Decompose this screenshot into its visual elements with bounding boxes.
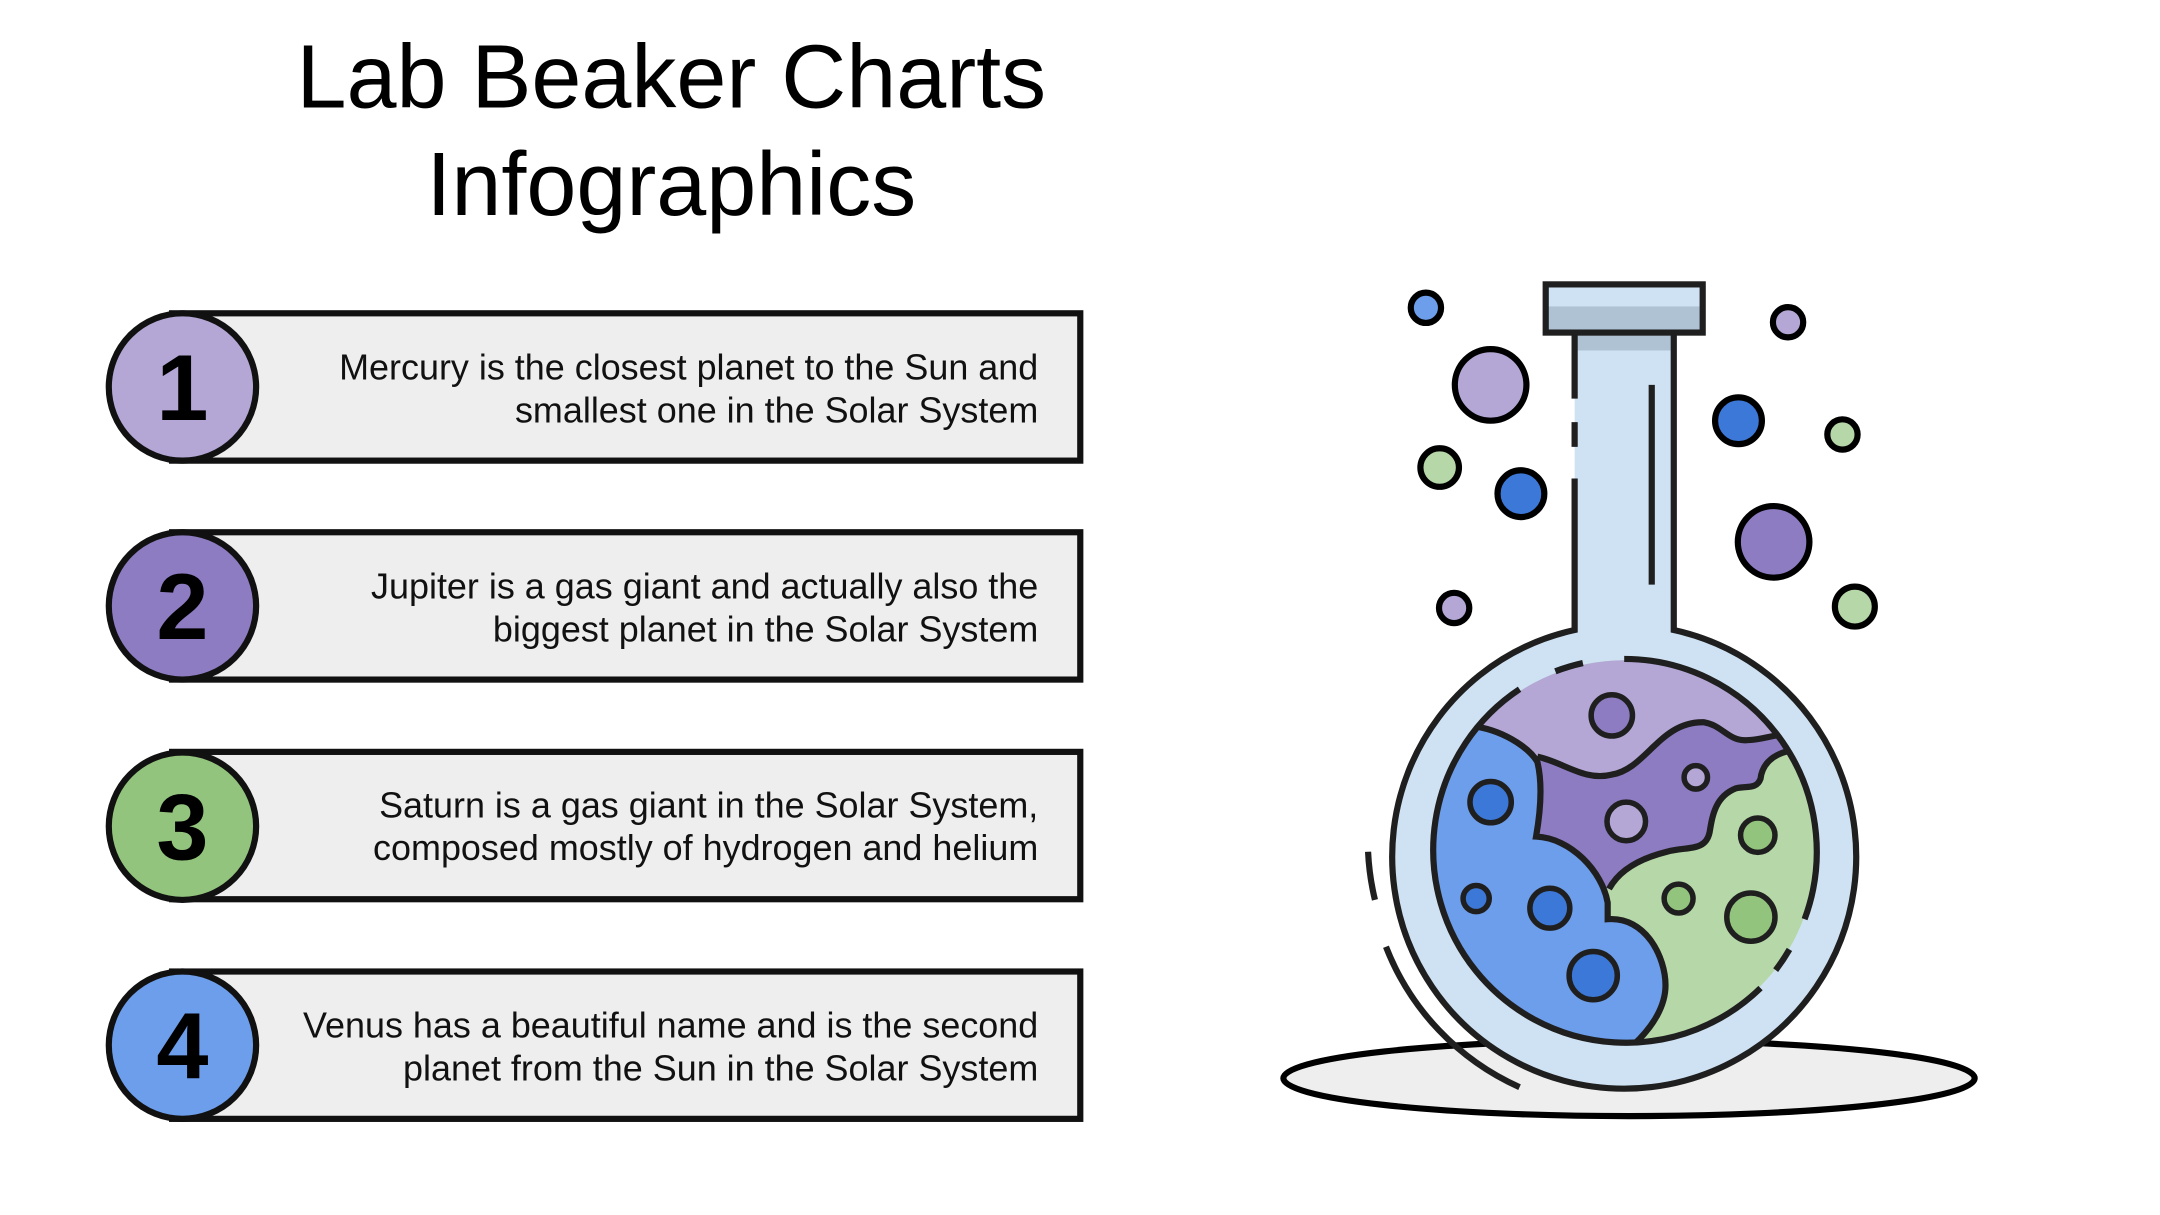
icon: number 4 badge: 4 xyxy=(156,993,208,1098)
text: Saturn description xyxy=(373,785,1038,868)
illustration: flask xyxy=(1368,284,1857,1090)
motion lines xyxy=(1368,852,1520,1087)
inner bubbles xyxy=(1463,695,1775,1000)
icon: number 2 badge: 2 xyxy=(156,554,208,659)
text: Venus description xyxy=(303,1005,1038,1088)
text: Saturn description: composed mostly of hydrogen and helium xyxy=(373,827,1038,868)
text: Mercury description xyxy=(339,347,1038,430)
flask outline xyxy=(1392,333,1856,1089)
icon: number 2 badge xyxy=(109,532,256,680)
liquid outline arcs xyxy=(1433,659,1817,1043)
text: Mercury description: Mercury is the closest planet to the Sun and xyxy=(339,347,1038,388)
title: Lab Beaker Charts xyxy=(296,27,1046,127)
text: Saturn description: Saturn is a gas giant in the Solar System, xyxy=(379,785,1038,826)
panel: item 2 Jupiter xyxy=(109,532,1080,680)
neck shadow xyxy=(1577,333,1671,350)
title: Infographics xyxy=(426,135,916,235)
text: Mercury description: smallest one in the Solar System xyxy=(515,389,1038,430)
icon: ground shadow ellipse xyxy=(1283,1040,1975,1116)
text: Jupiter description xyxy=(371,566,1038,649)
panel: item 3 Saturn xyxy=(109,752,1080,900)
title xyxy=(296,27,1046,235)
neck highlight line xyxy=(1649,385,1654,585)
flask stopper xyxy=(1546,284,1703,333)
text: Jupiter description: biggest planet in the Solar System xyxy=(493,608,1038,649)
panel: item 4 Venus xyxy=(109,972,1080,1119)
icon: number 1 badge xyxy=(109,313,256,461)
icon: number 3 badge xyxy=(109,753,256,900)
text: Venus description: planet from the Sun in the Solar System xyxy=(403,1047,1038,1088)
icon: number 1 badge: 1 xyxy=(156,335,208,440)
text: Venus description: Venus has a beautiful name and is the second xyxy=(303,1005,1038,1046)
icon: number 4 badge xyxy=(109,972,256,1119)
liquid layers xyxy=(1436,660,1814,1040)
text: Jupiter description: Jupiter is a gas giant and actually also the xyxy=(371,566,1038,607)
icon: number 3 badge: 3 xyxy=(156,774,208,879)
flask glass body xyxy=(1391,333,1857,1090)
panel: item 1 Mercury xyxy=(109,313,1080,461)
floating bubbles xyxy=(1411,293,1875,627)
